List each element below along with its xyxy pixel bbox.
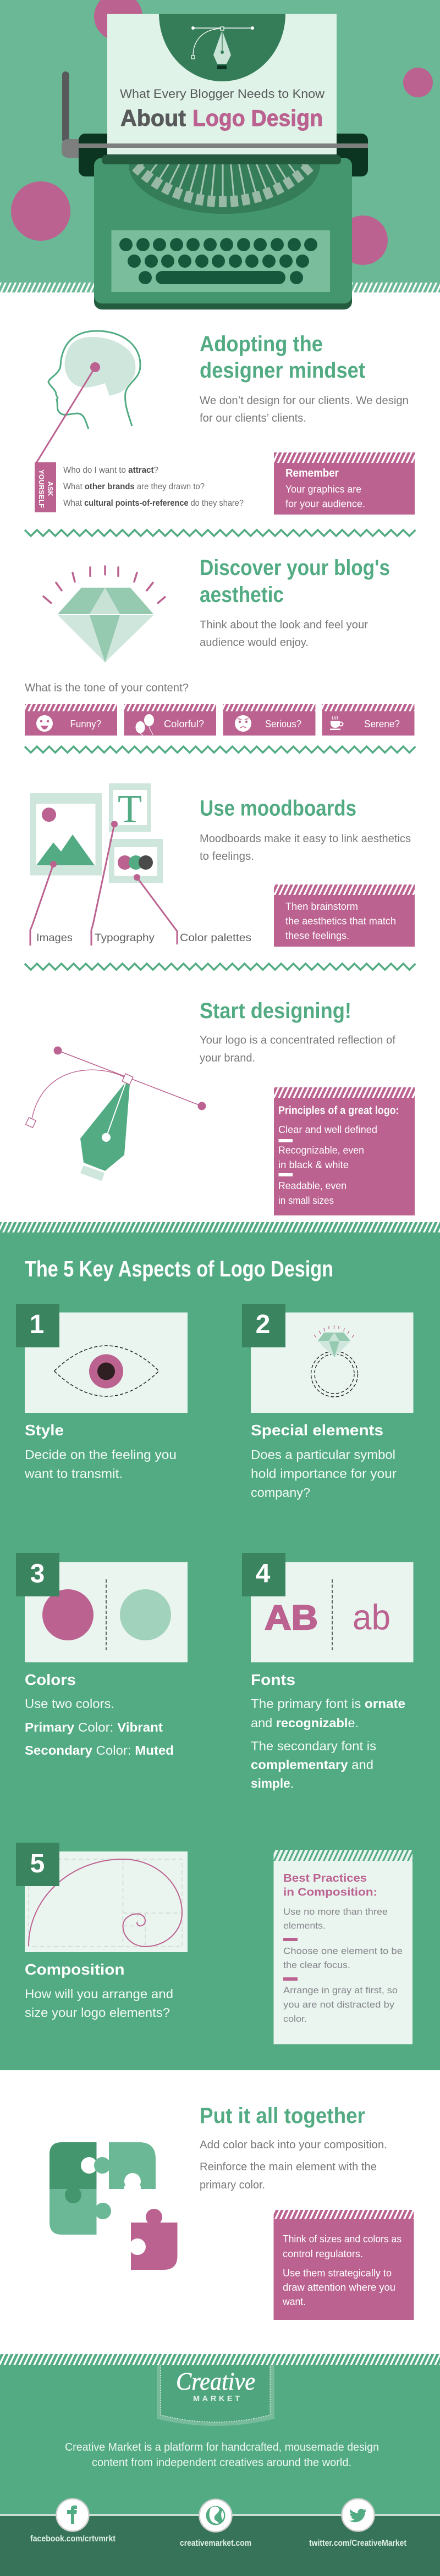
icon: serious face: [235, 715, 251, 732]
ask yourself tag: ASK: [46, 481, 54, 496]
footer panel: [0, 2354, 440, 2576]
title line one: What Every Blogger Needs to Know: [120, 87, 324, 101]
callout: remember: Your graphics are: [285, 484, 361, 495]
aspect 2: special elements: [242, 1304, 414, 1500]
aspect 3: colors: Use two colors.: [25, 1696, 114, 1711]
paper sheet with title: [107, 14, 337, 154]
callout: best practices in composition: Choose one element to be: [283, 1946, 403, 1956]
icon: balloons: [135, 714, 154, 736]
callout: best practices in composition: Best Practices: [283, 1872, 367, 1884]
tone card: funny: [25, 704, 117, 736]
icon: twitter bird: [342, 2499, 374, 2531]
icon: pen tool: [191, 26, 254, 69]
callout: principles of a great logo: [274, 1087, 415, 1215]
heading: aesthetic: [200, 583, 284, 607]
aspect 5: composition: size your logo elements?: [25, 2005, 170, 2020]
section: use moodboards: [30, 783, 415, 947]
body text: [200, 2138, 387, 2191]
pointer labels: [36, 932, 251, 944]
callout: principles of a great logo: Readable, even: [278, 1180, 346, 1191]
aspect 3: colors: Colors: [25, 1671, 76, 1688]
font specimens: ab: [353, 1597, 391, 1637]
Creative Market logo badge: MARKET: [193, 2395, 240, 2403]
body text: audience would enjoy.: [200, 636, 309, 649]
social links: facebook.com/crtvmrkt: [30, 2534, 116, 2544]
body text: Your logo is a concentrated reflection of: [200, 1033, 395, 1047]
aspect 1: style: 1: [30, 1310, 44, 1339]
aspect 5: composition: Composition: [25, 1961, 124, 1978]
body text: primary color.: [200, 2179, 265, 2191]
body text: Moodboards make it easy to link aesthetics: [200, 832, 411, 845]
body text: Reinforce the main element with the: [200, 2160, 377, 2173]
section: start designing: [26, 999, 415, 1215]
callout: brainstorm: Then brainstorm: [285, 901, 358, 912]
callout: best practices in composition: elements.: [283, 1921, 326, 1931]
aspect 3: colors: Secondary Color: Muted: [25, 1743, 174, 1757]
social links: creativemarket.com: [180, 2539, 251, 2548]
aspect 2: special elements: Does a particular symbol: [251, 1447, 395, 1462]
icon: diamond ring: [311, 1325, 358, 1397]
questions list: [63, 466, 244, 508]
aspect 1: style: want to transmit.: [24, 1467, 123, 1481]
callout: remember: for your audience.: [285, 498, 365, 509]
aspect 4: fonts: The primary font is ornate: [251, 1696, 405, 1711]
callout: principles of a great logo: Recognizable, even: [278, 1145, 364, 1156]
about text: content from independent creatives around the world.: [92, 2457, 351, 2469]
aspect 2: special elements: Special elements: [251, 1422, 383, 1439]
title line two: [120, 105, 323, 131]
pointer lines: [30, 824, 177, 946]
pink decorative circles: [11, 0, 433, 265]
heading: Adopting the: [200, 332, 323, 356]
aspect 4: fonts: The secondary font is: [251, 1739, 376, 1753]
callout: brainstorm: [274, 885, 415, 947]
font specimens: [265, 1579, 391, 1650]
callout: control regulators: [274, 2210, 414, 2320]
tone question: What is the tone of your content?: [25, 682, 189, 694]
aspect 3: colors: Primary Color: Vibrant: [25, 1720, 163, 1734]
callout: principles of a great logo: Clear and well defined: [278, 1124, 377, 1135]
aspect 3: colors: [16, 1553, 188, 1757]
heading: designer mindset: [200, 358, 365, 383]
body text: [200, 618, 368, 649]
pointer labels: Typography: [95, 932, 155, 944]
social links: twitter.com/CreativeMarket: [309, 2539, 407, 2548]
icon: eye: [54, 1346, 159, 1396]
aspect 3: colors: 3: [30, 1559, 45, 1589]
Creative Market logo badge: [157, 2365, 274, 2426]
aspect 4: fonts: and recognizable.: [251, 1716, 359, 1730]
callout: control regulators: Think of sizes and colors as: [283, 2234, 402, 2245]
panel: the 5 key aspects: [0, 1222, 440, 2070]
callout: principles of a great logo: in black & white: [278, 1159, 349, 1170]
typewriter carriage and lever: [62, 71, 368, 176]
pointer labels: Images: [36, 932, 73, 944]
keyboard: [111, 230, 330, 292]
section: adopting the designer mindset: [35, 331, 415, 515]
icon: head profile: [36, 331, 140, 463]
aspect 2: special elements: hold importance for your: [251, 1467, 397, 1481]
about text: [65, 2441, 379, 2469]
heading: [200, 332, 365, 383]
hero panel: typewriter header: [0, 0, 440, 309]
moodboard frame: typography: [109, 783, 151, 832]
icon: diamond with rays: [43, 566, 165, 662]
Creative Market logo badge: Creative: [176, 2367, 255, 2395]
callout: control regulators: want.: [282, 2296, 306, 2307]
callout: best practices in composition: Arrange in gray at first, so: [283, 1985, 398, 1995]
callout: control regulators: draw attention where you: [283, 2282, 395, 2293]
callout: brainstorm: the aesthetics that match: [285, 916, 396, 927]
body text: [200, 832, 411, 863]
body text: to feelings.: [200, 850, 254, 863]
about text: Creative Market is a platform for handcrafted, mousemade design: [65, 2441, 379, 2453]
callout: remember: [274, 452, 415, 515]
callout: best practices in composition: [274, 1850, 413, 2044]
icon: laughing face: [36, 715, 53, 732]
moodboard frame: typography: T: [118, 787, 142, 831]
color swatches: [42, 1579, 171, 1650]
aspect 1: style: Decide on the feeling you: [25, 1447, 177, 1462]
typewriter body: [94, 155, 352, 309]
tone card: serene: Serene?: [364, 718, 400, 729]
callout: best practices in composition: the clear focus.: [283, 1960, 350, 1970]
social links: [30, 2534, 407, 2548]
tone card: funny: Funny?: [70, 718, 101, 729]
title line two: Logo Design: [193, 105, 323, 131]
questions list: Who do I want to attract?: [63, 466, 158, 475]
moodboard frame: color palette: [109, 839, 163, 883]
body text: for our clients’ clients.: [200, 412, 306, 424]
section: put it all together: [50, 2104, 414, 2320]
aspect 5: composition: [16, 1843, 188, 2020]
aspect 1: style: [16, 1304, 188, 1481]
aspect 5: composition: How will you arrange and: [25, 1987, 173, 2001]
callout: best practices in composition: you are not distracted by: [283, 1999, 395, 2010]
pointer labels: Color palettes: [180, 932, 251, 944]
callout: brainstorm: these feelings.: [285, 930, 349, 941]
heading: Use moodboards: [200, 796, 356, 820]
body text: [200, 1033, 395, 1064]
icon: pen tool with bezier handles: [26, 1047, 206, 1181]
aspect 4: fonts: complementary and: [251, 1757, 373, 1772]
heading: The 5 Key Aspects of Logo Design: [25, 1256, 333, 1281]
icon: globe: [199, 2499, 232, 2532]
aspect 2: special elements: company?: [251, 1485, 310, 1500]
heading: Discover your blog's: [200, 556, 390, 580]
questions list: What cultural points-of-reference do they share?: [63, 499, 244, 508]
golden ratio spiral: [29, 1859, 182, 1947]
body text: Think about the look and feel your: [200, 618, 368, 631]
body text: Add color back into your composition.: [200, 2138, 387, 2151]
callout: principles of a great logo: Principles of a great logo:: [278, 1105, 399, 1117]
tone card: serious: [223, 704, 316, 736]
tone card: serene: [322, 704, 415, 736]
callout: best practices in composition: color.: [283, 2014, 307, 2024]
callout: principles of a great logo: in small sizes: [278, 1195, 334, 1206]
typebars: [132, 164, 314, 207]
tone card: colorful: Colorful?: [164, 718, 204, 729]
heading: Start designing!: [200, 999, 351, 1023]
heading: Put it all together: [200, 2104, 365, 2128]
aspect 4: fonts: simple.: [251, 1776, 294, 1790]
callout: control regulators: control regulators.: [283, 2248, 363, 2259]
ask yourself tag: [35, 462, 56, 512]
questions list: What other brands are they drawn to?: [63, 482, 205, 491]
icon: steaming cup: [330, 716, 343, 730]
aspect 5: composition: 5: [30, 1849, 45, 1878]
tone card: colorful: [124, 704, 216, 736]
callout: control regulators: Use them strategically to: [283, 2268, 392, 2279]
body text: We don’t design for our clients. We design: [200, 394, 409, 407]
callout: remember: Remember: [285, 467, 339, 479]
aspect 4: fonts: Fonts: [251, 1671, 295, 1688]
callout: best practices in composition: Use no more than three: [283, 1906, 388, 1917]
moodboard frame: image: [30, 793, 102, 875]
icon: puzzle pieces: [50, 2142, 177, 2270]
aspect 4: fonts: [242, 1553, 414, 1790]
aspect 1: style: Style: [25, 1422, 64, 1439]
ask yourself tag: YOURSELF: [37, 469, 45, 508]
section: discover your blog's aesthetic: [25, 556, 415, 736]
font specimens: AB: [265, 1599, 318, 1637]
heading: [200, 556, 390, 607]
aspect 4: fonts: 4: [256, 1559, 271, 1589]
icon: facebook: [56, 2499, 89, 2531]
body text: [200, 394, 409, 424]
body text: your brand.: [200, 1052, 255, 1064]
callout: best practices in composition: in Composition:: [283, 1886, 377, 1899]
aspect 2: special elements: 2: [256, 1310, 270, 1339]
title line two: About: [120, 105, 186, 131]
tone card: serious: Serious?: [265, 718, 301, 729]
